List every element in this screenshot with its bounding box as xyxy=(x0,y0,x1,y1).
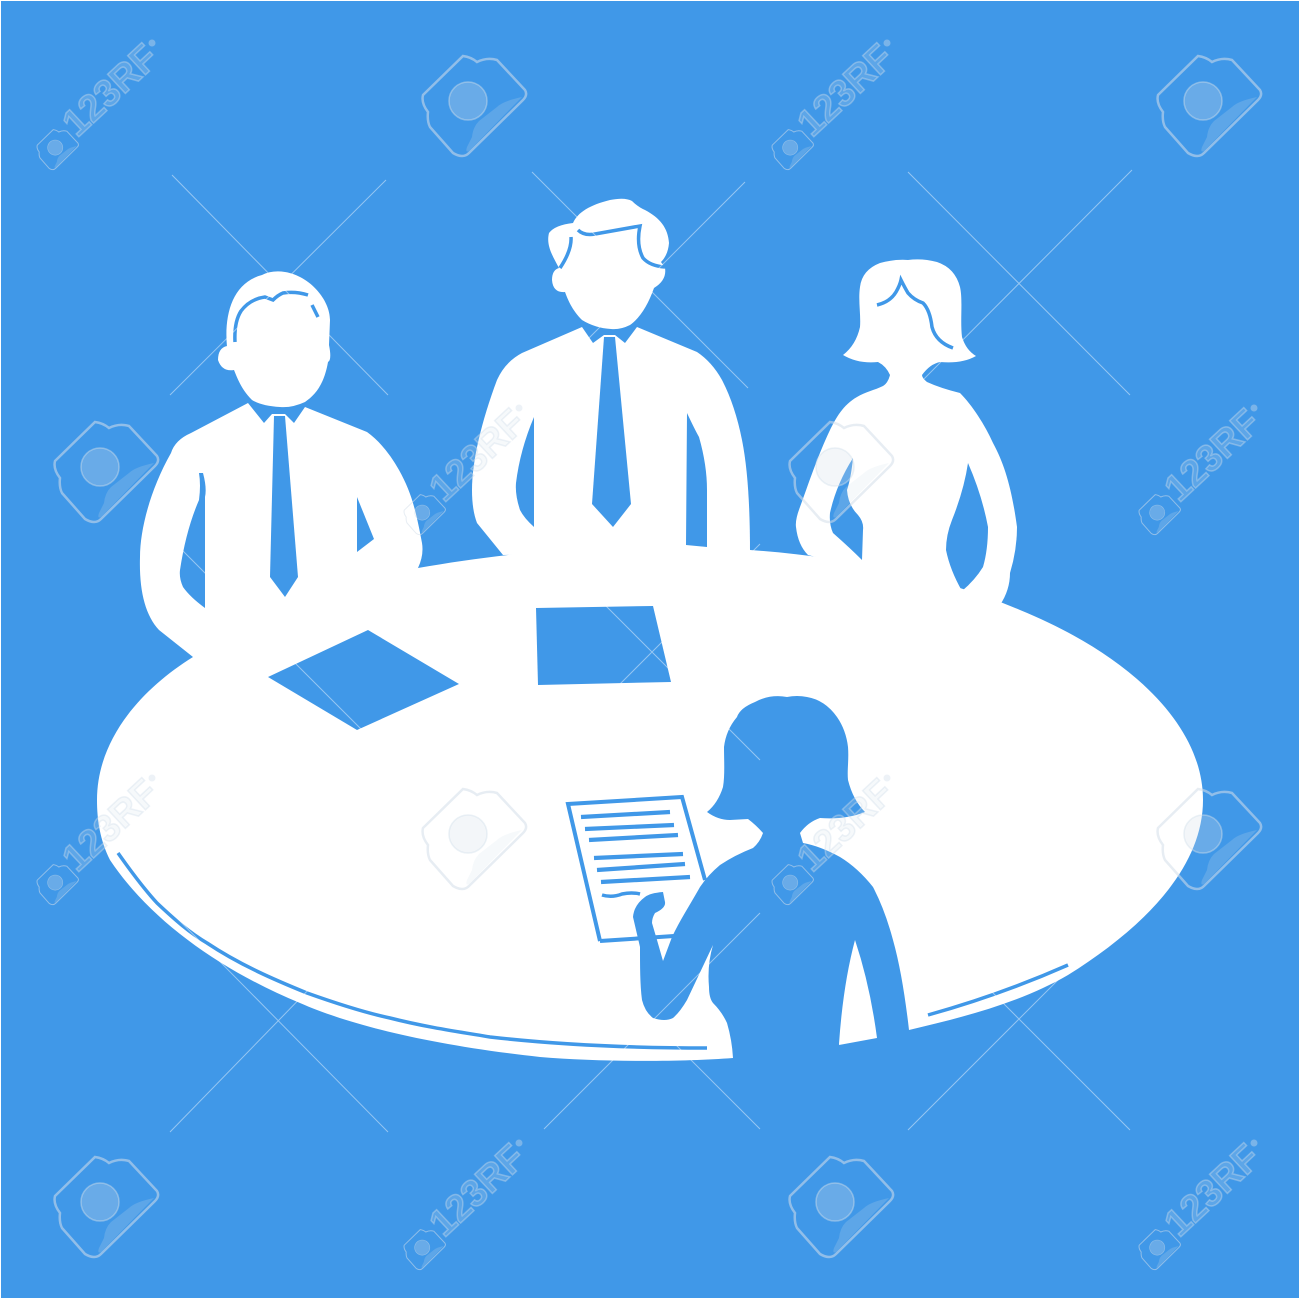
person: centre man xyxy=(472,199,750,555)
document held xyxy=(568,797,705,941)
paper: centre sheet xyxy=(536,606,671,685)
table xyxy=(97,546,1203,1061)
person: right woman xyxy=(796,259,1017,605)
table right highlight xyxy=(928,965,1068,1015)
table left highlight xyxy=(118,853,707,1048)
watermark guide lines xyxy=(170,170,1132,1132)
person: left man xyxy=(140,271,422,700)
person: foreground woman silhouette xyxy=(633,696,912,1062)
paper: left sheet xyxy=(268,630,459,730)
